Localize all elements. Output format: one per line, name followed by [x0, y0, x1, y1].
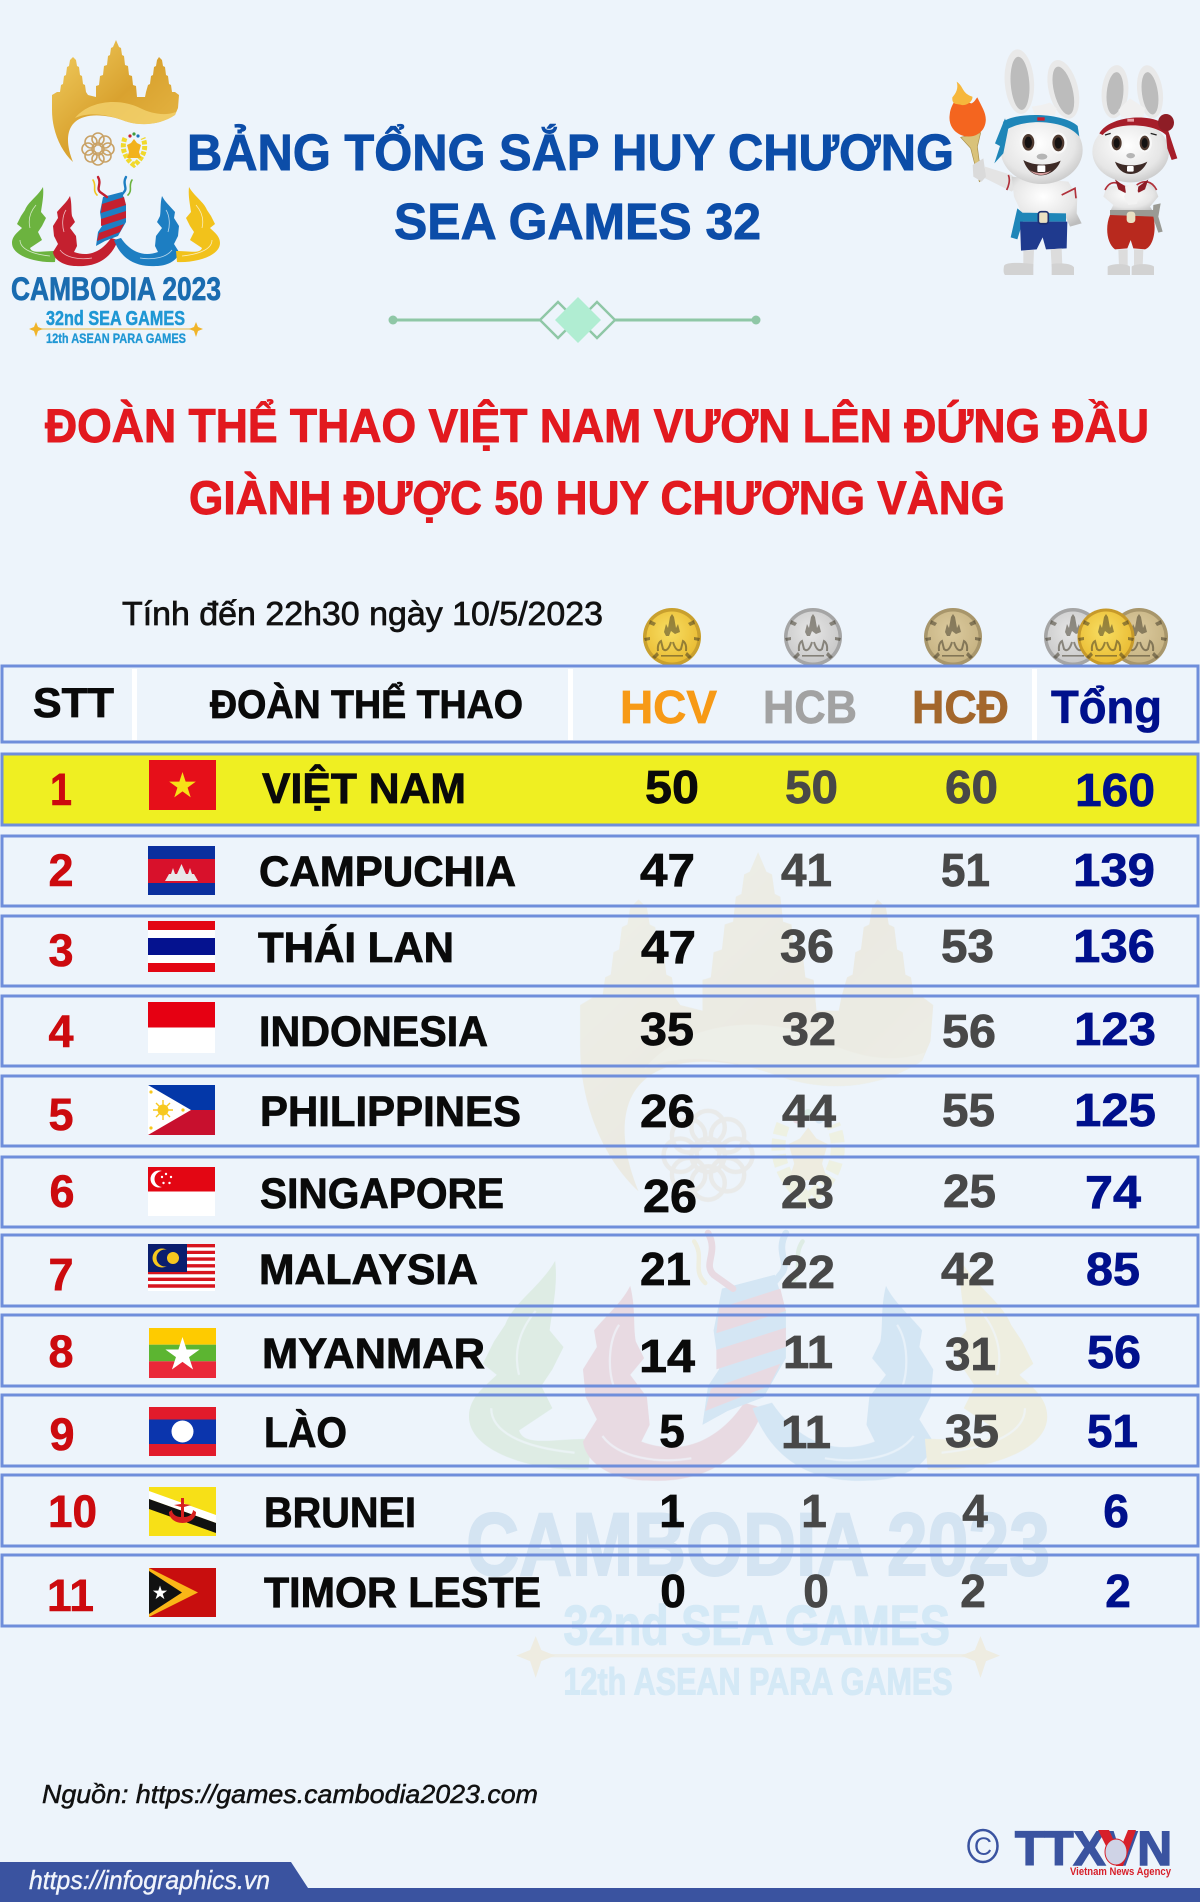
row 11: Timor Leste: 0	[660, 1565, 686, 1617]
watermark: Cambodia 2023 logo: 32nd SEA GAMES	[563, 1595, 950, 1657]
icon: gold medal	[643, 608, 701, 666]
table header: ĐOÀN THỂ THAO	[210, 680, 523, 727]
icon: Singapore flag	[148, 1167, 215, 1216]
row 4: Indonesia: 32	[782, 1003, 836, 1055]
icon: silver medal	[784, 608, 842, 666]
row 9: Lào: LÀO	[264, 1409, 347, 1457]
row 3: Thái Lan	[2, 916, 1198, 986]
icon: Malaysia flag	[148, 1244, 215, 1291]
row 6: Singapore: 25	[943, 1165, 996, 1217]
subtitle headline: GIÀNH ĐƯỢC 50 HUY CHƯƠNG VÀNG	[189, 471, 1005, 524]
row 8: Myanmar: 8	[48, 1326, 74, 1377]
row 9: Lào: 5	[659, 1405, 685, 1457]
row 8: Myanmar: 31	[945, 1328, 996, 1380]
row 10: Brunei	[2, 1475, 1198, 1546]
row 4: Indonesia: 123	[1074, 1003, 1156, 1055]
row 4: Indonesia: 4	[48, 1006, 74, 1057]
row 8: Myanmar: MYANMAR	[262, 1330, 485, 1378]
icon: Vietnam flag	[149, 760, 216, 810]
row 6: Singapore: 6	[49, 1166, 75, 1217]
logo: Cambodia 2023 SEA Games: 32nd SEA GAMES	[46, 308, 185, 330]
icon: Brunei flag	[149, 1487, 216, 1536]
title: BẢNG TỔNG SẮP HUY CHƯƠNG	[187, 123, 954, 181]
table header: STT	[33, 679, 114, 726]
icon: bronze medal	[924, 608, 982, 666]
logo: TTXVN copyright: C	[974, 1833, 992, 1861]
row 11: Timor Leste: 11	[47, 1570, 94, 1621]
row 7: Malaysia: 22	[781, 1246, 835, 1298]
row 10: Brunei: 6	[1103, 1485, 1129, 1537]
row 2: Campuchia: 2	[48, 845, 74, 896]
row 10: Brunei: 10	[48, 1486, 97, 1537]
row 11: Timor Leste: TIMOR LESTE	[264, 1569, 541, 1617]
mascot: red rabbit	[1092, 63, 1177, 275]
row 3: Thái Lan: 36	[780, 920, 834, 972]
row 1: Việt Nam: 60	[945, 761, 998, 813]
medal icons	[643, 608, 1168, 666]
row 10: Brunei: 4	[962, 1485, 988, 1537]
icon: Myanmar flag	[149, 1328, 216, 1378]
logo: Cambodia 2023 SEA Games	[11, 40, 221, 346]
row 2: Campuchia	[2, 836, 1198, 906]
row 2: Campuchia: CAMPUCHIA	[259, 848, 516, 896]
row 3: Thái Lan: 53	[941, 920, 994, 972]
subtitle headline	[45, 399, 1149, 524]
decorative diamond divider	[388, 297, 760, 343]
row 1: Việt Nam	[2, 754, 1198, 825]
row 7: Malaysia: 21	[640, 1243, 691, 1295]
table header	[2, 666, 1198, 742]
date note: Tính đến 22h30 ngày 10/5/2023	[122, 595, 603, 632]
row 4: Indonesia	[2, 996, 1198, 1066]
logo: TTXVN copyright: TTXVN	[1015, 1823, 1172, 1876]
icon: Cambodia flag	[148, 846, 215, 895]
icon: Laos flag	[149, 1407, 216, 1456]
watermark: Cambodia 2023 logo: 12th ASEAN PARA GAMES	[563, 1661, 953, 1703]
title	[187, 123, 954, 250]
row 4: Indonesia: 35	[640, 1003, 694, 1055]
row 1: Việt Nam: 1	[50, 764, 72, 815]
table header: Tổng	[1051, 681, 1162, 733]
row 9: Lào: 35	[945, 1405, 999, 1457]
row 6: Singapore: 26	[643, 1170, 697, 1222]
footer bar: https://infographics.vn	[29, 1865, 270, 1895]
icon: torch	[949, 82, 986, 182]
row 2: Campuchia: 139	[1073, 844, 1155, 896]
row 7: Malaysia: 42	[941, 1243, 995, 1295]
row 2: Campuchia: 41	[781, 844, 832, 896]
logo: Cambodia 2023 SEA Games: CAMBODIA 2023	[11, 271, 221, 307]
subtitle headline: ĐOÀN THỂ THAO VIỆT NAM VƯƠN LÊN ĐỨNG ĐẦU	[45, 399, 1149, 452]
row 1: Việt Nam: 160	[1075, 764, 1155, 816]
icon: Philippines flag	[148, 1085, 215, 1135]
row 2: Campuchia: 47	[640, 844, 695, 896]
row 5: Philippines: 125	[1074, 1084, 1156, 1136]
row 8: Myanmar	[2, 1315, 1198, 1386]
row 6: Singapore	[2, 1157, 1198, 1227]
row 5: Philippines	[2, 1076, 1198, 1146]
row 11: Timor Leste	[2, 1555, 1198, 1626]
icon: Thailand flag	[148, 921, 215, 972]
row 4: Indonesia: 56	[942, 1005, 996, 1057]
row 3: Thái Lan: THÁI LAN	[258, 924, 454, 972]
logo: Cambodia 2023 SEA Games: 12th ASEAN PARA GAMES	[46, 331, 186, 346]
watermark: Cambodia 2023 logo: CAMBODIA 2023	[466, 1494, 1050, 1594]
row 11: Timor Leste: 2	[1105, 1565, 1131, 1617]
icon: three medals	[1044, 608, 1168, 666]
row 7: Malaysia	[2, 1235, 1198, 1306]
row 10: Brunei: BRUNEI	[264, 1489, 416, 1537]
row 3: Thái Lan: 3	[48, 925, 74, 976]
row 7: Malaysia: MALAYSIA	[259, 1246, 478, 1294]
logo: TTXVN copyright: Vietnam News Agency	[1070, 1866, 1172, 1878]
row 3: Thái Lan: 136	[1073, 920, 1155, 972]
row 1: Việt Nam: 50	[645, 761, 699, 813]
row 8: Myanmar: 11	[783, 1326, 833, 1378]
source note: Nguồn: https://games.cambodia2023.com	[42, 1779, 538, 1809]
row 8: Myanmar: 56	[1087, 1326, 1141, 1378]
icon: Timor Leste flag	[149, 1568, 216, 1617]
row 6: Singapore: 23	[781, 1166, 834, 1218]
row 11: Timor Leste: 0	[803, 1565, 829, 1617]
row 6: Singapore: 74	[1085, 1166, 1141, 1218]
title: SEA GAMES 32	[394, 193, 761, 250]
row 7: Malaysia: 7	[48, 1249, 74, 1300]
row 5: Philippines: 55	[942, 1084, 995, 1136]
mascots: rabbits with torch	[949, 48, 1177, 275]
row 10: Brunei: 1	[659, 1485, 685, 1537]
row 7: Malaysia: 85	[1086, 1243, 1140, 1295]
row 9: Lào: 11	[781, 1406, 831, 1458]
icon: Indonesia flag	[148, 1002, 215, 1053]
row 3: Thái Lan: 47	[641, 921, 696, 973]
mascot: blue rabbit	[973, 48, 1085, 275]
row 5: Philippines: 26	[640, 1085, 695, 1137]
row 1: Việt Nam: 50	[785, 761, 838, 813]
row 2: Campuchia: 51	[941, 844, 990, 896]
watermark: Cambodia 2023 logo	[466, 852, 1050, 1703]
table header: HCV	[620, 681, 717, 733]
table header: HCB	[763, 681, 857, 733]
row 9: Lào	[2, 1395, 1198, 1466]
row 1: Việt Nam: VIỆT NAM	[262, 764, 466, 813]
table header: HCĐ	[912, 681, 1009, 733]
row 10: Brunei: 1	[801, 1485, 827, 1537]
row 5: Philippines: PHILIPPINES	[260, 1088, 521, 1136]
row 6: Singapore: SINGAPORE	[260, 1170, 504, 1218]
row 4: Indonesia: INDONESIA	[259, 1008, 488, 1056]
row 8: Myanmar: 14	[639, 1330, 695, 1382]
row 5: Philippines: 44	[782, 1085, 836, 1137]
row 9: Lào: 9	[49, 1409, 75, 1460]
footer bar	[0, 1862, 1200, 1902]
row 5: Philippines: 5	[48, 1089, 74, 1140]
row 11: Timor Leste: 2	[960, 1565, 986, 1617]
row 9: Lào: 51	[1087, 1405, 1138, 1457]
